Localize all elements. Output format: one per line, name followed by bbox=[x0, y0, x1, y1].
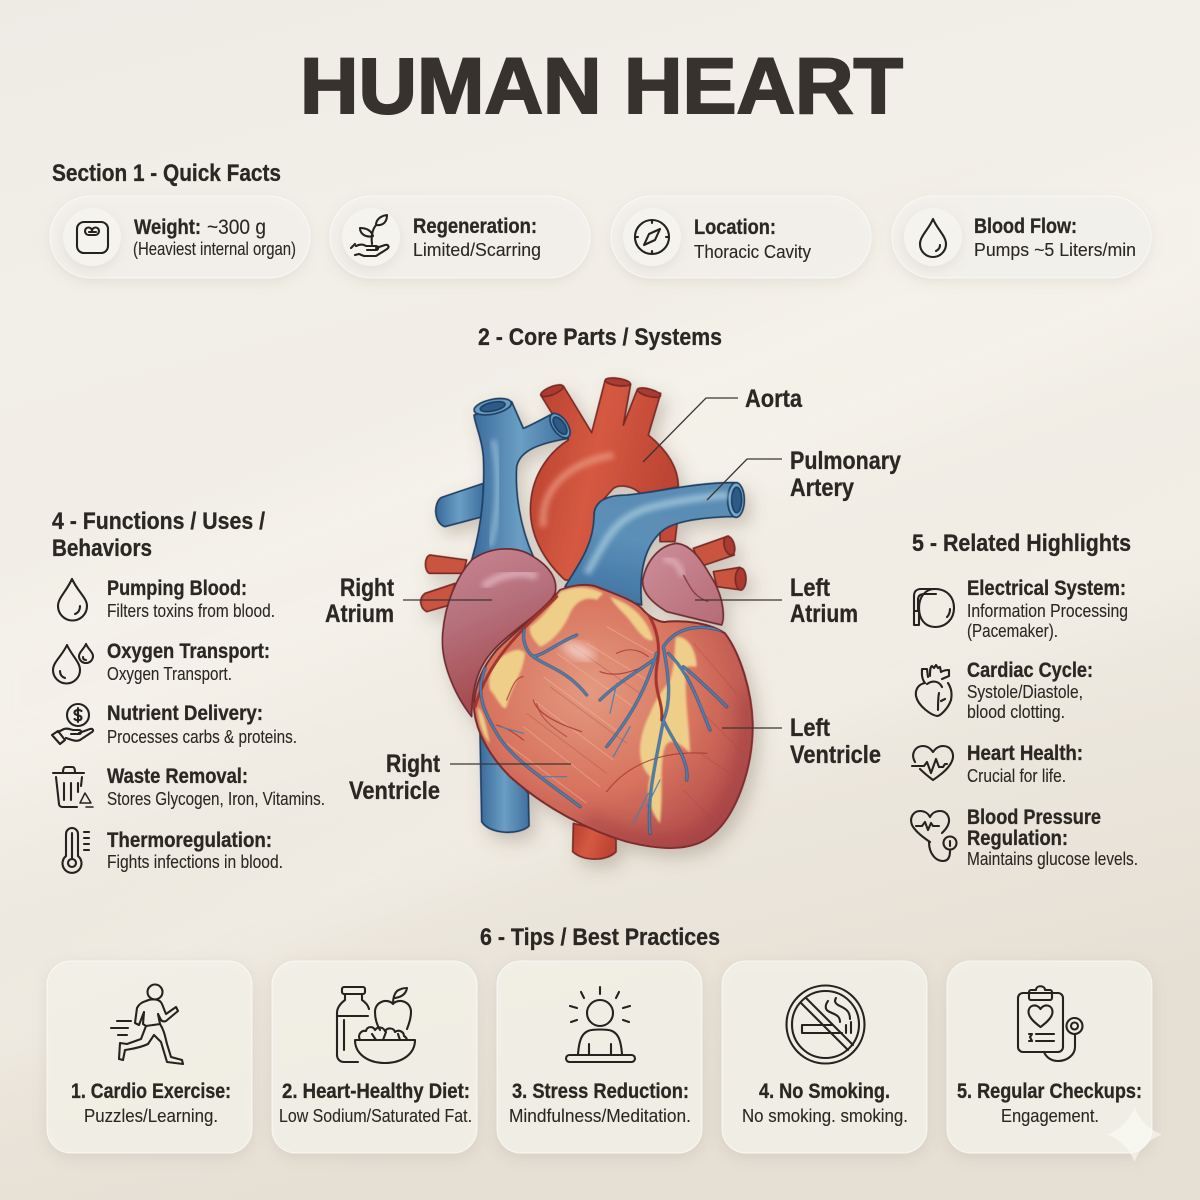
card: weight: ~300 g bbox=[207, 216, 266, 239]
icon: drop bbox=[58, 579, 87, 620]
label: aorta: Aorta bbox=[745, 385, 803, 413]
coronary vessels bbox=[481, 627, 727, 833]
icon: pacemaker bbox=[914, 589, 954, 627]
icon: compass bbox=[635, 220, 669, 254]
card: cardio exercise: 1. Cardio Exercise: bbox=[71, 1080, 231, 1103]
label: left ventricle: Ventricle bbox=[790, 741, 881, 769]
card: regular checkups: 5. Regular Checkups: bbox=[957, 1080, 1142, 1103]
label: pulmonary artery bbox=[790, 447, 901, 502]
label: right atrium: Right bbox=[340, 574, 395, 602]
item: thermoregulation bbox=[62, 828, 283, 873]
item: waste removal: Waste Removal: bbox=[107, 765, 248, 788]
panel: related highlights bbox=[911, 577, 1138, 869]
label: left atrium: Atrium bbox=[790, 600, 858, 628]
card: regeneration bbox=[330, 196, 590, 278]
section 2 heading: 2 - Core Parts / Systems bbox=[478, 324, 722, 351]
item: blood pressure regulation: Regulation: bbox=[967, 827, 1068, 850]
section 4 heading bbox=[52, 508, 265, 562]
pulmonary veins bbox=[421, 535, 746, 612]
label: right atrium: Atrium bbox=[325, 600, 394, 628]
icon: meditating person bbox=[566, 987, 635, 1062]
icon: recycling bin bbox=[53, 767, 93, 807]
left atrium bbox=[643, 543, 723, 625]
aorta bbox=[530, 377, 679, 580]
title: HUMAN HEART bbox=[300, 41, 903, 130]
card: location: Location: bbox=[694, 216, 776, 239]
item: electrical system bbox=[914, 577, 1128, 641]
right atrium bbox=[442, 549, 556, 717]
item: cardiac cycle: blood clotting. bbox=[967, 701, 1065, 722]
label: right ventricle: Ventricle bbox=[349, 777, 440, 805]
card: heart-healthy diet: Low Sodium/Saturated Fat. bbox=[279, 1105, 472, 1126]
card: blood flow: Blood Flow: bbox=[974, 215, 1077, 238]
card: cardio exercise: Puzzles/Learning. bbox=[84, 1105, 218, 1126]
card: blood flow bbox=[892, 196, 1151, 278]
card: no smoking bbox=[722, 961, 927, 1153]
icon: thermometer bbox=[62, 828, 89, 873]
item: pumping blood: Pumping Blood: bbox=[107, 577, 247, 600]
item: nutrient delivery bbox=[52, 702, 297, 747]
label: right ventricle: Right bbox=[386, 750, 441, 778]
card: location: Thoracic Cavity bbox=[694, 241, 812, 262]
label lines bbox=[403, 398, 782, 764]
item: pumping blood bbox=[58, 577, 275, 621]
heart illustration bbox=[421, 377, 753, 859]
item: pumping blood: Filters toxins from blood. bbox=[107, 600, 275, 621]
icon: heart with ECG bbox=[912, 746, 953, 780]
card: stress reduction bbox=[497, 961, 702, 1153]
item: blood pressure regulation: Maintains glucose levels. bbox=[967, 848, 1138, 869]
label: pulmonary artery: Pulmonary bbox=[790, 447, 901, 475]
card: regeneration: Limited/Scarring bbox=[413, 239, 541, 260]
sparkle watermark bbox=[1107, 1107, 1162, 1162]
muscle fibres bbox=[507, 627, 653, 803]
pulmonary artery bbox=[565, 483, 744, 605]
item: thermoregulation: Fights infections in blood. bbox=[107, 851, 283, 872]
icon: clipboard and stethoscope bbox=[1018, 986, 1082, 1061]
item: oxygen transport bbox=[53, 640, 270, 684]
icon: anatomical heart bbox=[916, 665, 952, 716]
icon: heart with gauge bbox=[911, 811, 956, 861]
inferior vena cava bbox=[480, 733, 529, 832]
arteries bbox=[475, 597, 707, 792]
card: cardio exercise bbox=[47, 961, 252, 1153]
icon: drop bbox=[920, 219, 946, 257]
icon: hand with coin bbox=[52, 704, 93, 744]
card: heart-healthy diet: 2. Heart-Healthy Diet: bbox=[282, 1080, 470, 1103]
card: weight: (Heaviest internal organ) bbox=[133, 238, 296, 259]
section 1 heading: Section 1 - Quick Facts bbox=[52, 160, 281, 187]
ventricles bbox=[474, 585, 753, 848]
section 5 heading: 5 - Related Highlights bbox=[912, 530, 1131, 557]
panel: quick facts bbox=[50, 196, 1151, 278]
label: pulmonary artery: Artery bbox=[790, 474, 854, 502]
card: blood flow: Pumps ~5 Liters/min bbox=[974, 239, 1136, 260]
item: oxygen transport: Oxygen Transport. bbox=[107, 663, 232, 684]
item: oxygen transport: Oxygen Transport: bbox=[107, 640, 270, 663]
item: blood pressure regulation bbox=[911, 806, 1138, 869]
icon: sprout in hand bbox=[351, 215, 388, 256]
item: cardiac cycle: Cardiac Cycle: bbox=[967, 659, 1093, 682]
item: nutrient delivery: Processes carbs & proteins. bbox=[107, 726, 297, 747]
label: right atrium bbox=[325, 574, 395, 628]
card: weight: Weight: bbox=[134, 216, 201, 239]
icon: scale bbox=[77, 222, 108, 253]
item: electrical system: Electrical System: bbox=[967, 577, 1126, 600]
fat deposits bbox=[477, 587, 697, 823]
card: stress reduction: Mindfulness/Meditation. bbox=[509, 1105, 691, 1126]
item: heart health: Heart Health: bbox=[967, 742, 1083, 765]
section 6 heading: 6 - Tips / Best Practices bbox=[480, 924, 720, 951]
item: heart health bbox=[912, 742, 1083, 786]
item: electrical system: (Pacemaker). bbox=[967, 620, 1058, 641]
icon: bottle and bowl bbox=[337, 987, 415, 1063]
label: left ventricle: Left bbox=[790, 714, 831, 742]
card: no smoking: 4. No Smoking. bbox=[759, 1080, 890, 1103]
label: left atrium: Left bbox=[790, 574, 831, 602]
item: electrical system: Information Processing bbox=[967, 600, 1128, 621]
item: nutrient delivery: Nutrient Delivery: bbox=[107, 702, 263, 725]
item: cardiac cycle bbox=[916, 659, 1093, 722]
item: blood pressure regulation: Blood Pressure bbox=[967, 806, 1101, 829]
superior vena cava bbox=[436, 396, 574, 560]
item: waste removal bbox=[53, 765, 325, 809]
card: no smoking: No smoking. smoking. bbox=[742, 1105, 908, 1126]
label: left atrium bbox=[790, 574, 858, 628]
card: stress reduction: 3. Stress Reduction: bbox=[512, 1080, 689, 1103]
panel: functions list bbox=[52, 577, 325, 873]
card: regular checkups: Engagement. bbox=[1001, 1105, 1099, 1126]
card: weight bbox=[50, 196, 310, 278]
section 4 heading: Behaviors bbox=[52, 535, 152, 562]
card: regeneration: Regeneration: bbox=[413, 215, 537, 238]
label: left ventricle bbox=[790, 714, 881, 769]
panel: tips bbox=[47, 961, 1152, 1153]
section 4 heading: 4 - Functions / Uses / bbox=[52, 508, 265, 535]
icon: no smoking bbox=[786, 986, 864, 1064]
card: location bbox=[611, 196, 871, 278]
item: heart health: Crucial for life. bbox=[967, 765, 1066, 786]
item: cardiac cycle: Systole/Diastole, bbox=[967, 681, 1083, 702]
descending aorta bbox=[573, 823, 616, 859]
label: right ventricle bbox=[349, 750, 441, 805]
icon: runner bbox=[111, 984, 183, 1064]
icon: two drops bbox=[53, 644, 93, 684]
item: waste removal: Stores Glycogen, Iron, Vitamins. bbox=[107, 788, 325, 809]
item: thermoregulation: Thermoregulation: bbox=[107, 829, 272, 852]
card: regular checkups bbox=[947, 961, 1152, 1153]
card: heart-healthy diet bbox=[272, 961, 477, 1153]
